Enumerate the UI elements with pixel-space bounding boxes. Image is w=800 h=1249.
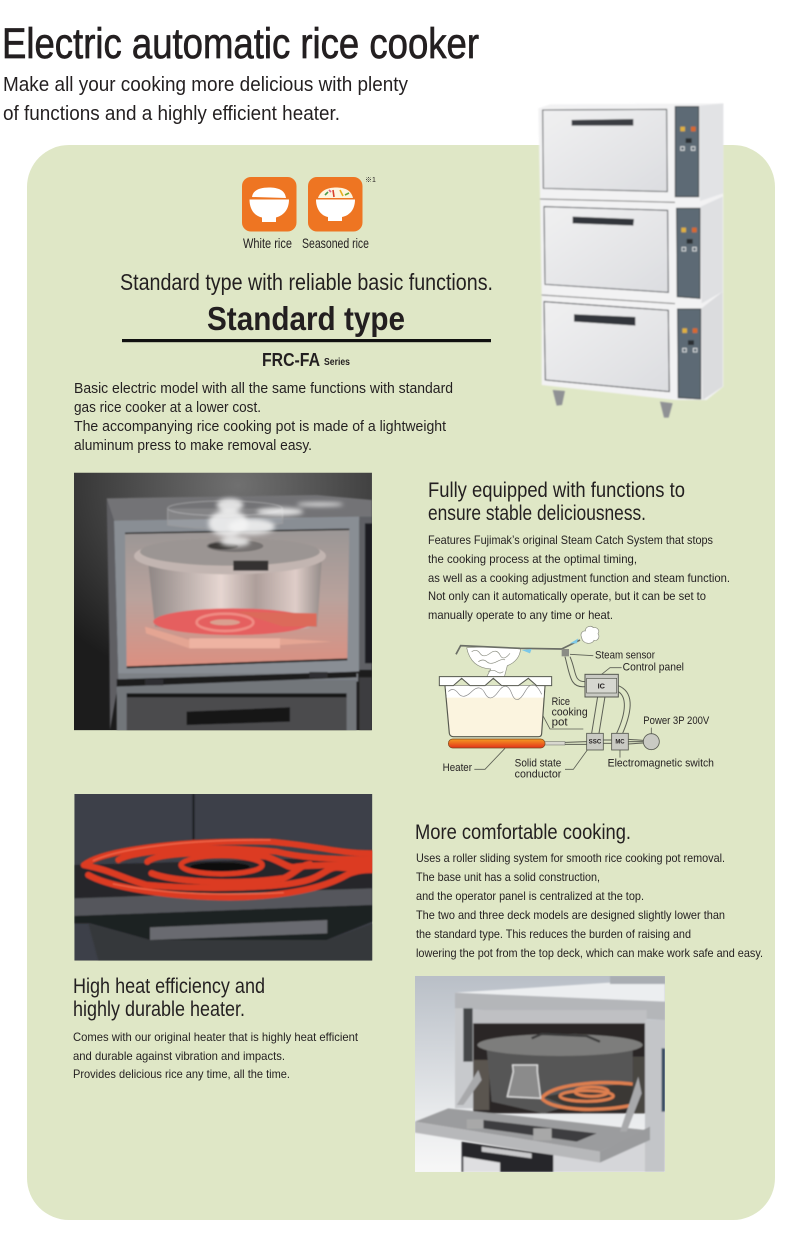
SSC box [587, 733, 603, 750]
text block: introduction: Basic electric model with all the same functions with standard [74, 380, 453, 397]
control panels [675, 107, 699, 197]
text block: heater: Comes with our original heater that is highly heat efficient [73, 1030, 359, 1044]
text block: stable deliciousness: Not only can it automatically operate, but it can be set to [428, 589, 706, 603]
text block: heater: and durable against vibration and impacts. [73, 1049, 285, 1063]
diagram labels: Power 3P 200V [643, 715, 710, 727]
red glow [153, 608, 313, 635]
icon: white rice [242, 177, 296, 232]
heading: heater: High heat efficiency and [73, 975, 265, 998]
MC box: MC [615, 739, 625, 746]
icon labels: Seasoned rice [302, 235, 369, 251]
text block: comfortable cooking: and the operator panel is centralized at the top. [416, 889, 644, 903]
photo: roller sliding drawer [415, 976, 665, 1172]
subtitle: of functions and a highly efficient heater. [3, 102, 340, 125]
diagram labels: cooking [552, 706, 588, 718]
MC box [612, 733, 628, 750]
handles [572, 119, 633, 126]
heading: standard type: Standard type [207, 300, 405, 337]
leader lines [474, 654, 651, 769]
doors [543, 109, 667, 192]
glass ring [168, 501, 282, 516]
pot body [148, 562, 322, 633]
text block: comfortable cooking: Uses a roller sliding system for smooth rice cooking pot removal. [416, 851, 725, 865]
lower deck [462, 1142, 553, 1172]
subtitle: Make all your cooking more delicious with plenty [3, 73, 409, 96]
text block: introduction: aluminum press to make removal easy. [74, 437, 312, 454]
lower deck [118, 673, 358, 682]
text block: comfortable cooking [416, 851, 763, 960]
text block: introduction: The accompanying rice cooking pot is made of a lightweight [74, 418, 447, 435]
coil [543, 1082, 633, 1113]
diagram labels [443, 649, 714, 781]
text block: stable deliciousness: as well as a cooking adjustment function and steam function. [428, 571, 730, 585]
heading: standard type: Series [324, 357, 350, 368]
heater [545, 742, 565, 745]
icon: seasoned rice [308, 177, 362, 232]
heading: stable deliciousness: ensure stable deliciousness. [428, 502, 646, 525]
text block: introduction [74, 380, 453, 454]
pot [487, 1048, 633, 1113]
photo: heater coil [74, 794, 372, 961]
wires [565, 657, 643, 744]
text block: stable deliciousness: Features Fujimak’s original Steam Catch System that stops [428, 533, 713, 547]
power source [643, 734, 659, 750]
diagram labels: pot [552, 716, 568, 728]
IC box [585, 674, 618, 697]
diagram labels: Steam sensor [595, 649, 655, 661]
legs [553, 390, 565, 406]
text block: comfortable cooking: lowering the pot from the top deck, which can make work safe and easy. [416, 946, 763, 960]
diagram labels: Rice [552, 696, 570, 708]
heading: stable deliciousness [428, 479, 685, 525]
text block: comfortable cooking: the standard type. This reduces the burden of raising and [416, 927, 691, 941]
text block: stable deliciousness: manually operate to any time or heat. [428, 608, 613, 622]
diagram labels: Heater [443, 762, 472, 774]
diagram: steam catch system [439, 626, 714, 781]
heading: standard type: Standard type with reliable basic functions. [120, 269, 493, 295]
text block: heater [73, 1030, 359, 1081]
diagram labels: Solid state [515, 757, 561, 769]
text block: comfortable cooking: The base unit has a solid construction, [416, 870, 600, 884]
lid and vent [456, 640, 580, 654]
diagram labels: conductor [515, 769, 562, 781]
IC box: IC [598, 682, 606, 691]
text block: comfortable cooking: The two and three deck models are designed slightly lower than [416, 908, 725, 922]
icon labels: White rice [243, 235, 292, 251]
text block: introduction: gas rice cooker at a lower cost. [74, 399, 261, 416]
photo: steam and pot cutaway [74, 473, 372, 732]
diagram labels: Electromagnetic switch [608, 757, 714, 769]
icon labels [243, 235, 369, 251]
text block: heater: Provides delicious rice any time, all the time. [73, 1067, 290, 1081]
steam inside lid [467, 647, 521, 678]
drawer front [415, 1108, 645, 1152]
heading: comfortable cooking: More comfortable cooking. [415, 821, 631, 844]
coil [84, 842, 372, 897]
heading: standard type [120, 269, 493, 370]
text block: stable deliciousness: the cooking process at the optimal timing, [428, 552, 637, 566]
footnote mark: ※1 [365, 176, 376, 184]
title: Electric automatic rice cooker [2, 20, 479, 68]
product photo: three-deck rice cooker [538, 103, 723, 418]
subtitle [3, 73, 409, 125]
rice cooking pot [445, 686, 545, 737]
steam [208, 498, 343, 546]
diagram labels: Control panel [623, 662, 684, 674]
heading: heater: highly durable heater. [73, 998, 245, 1021]
steam puff [581, 626, 599, 643]
heading: standard type: FRC-FA [262, 350, 320, 370]
SSC box: SSC [589, 739, 601, 746]
heading: stable deliciousness: Fully equipped with functions to [428, 479, 685, 502]
text block: stable deliciousness [428, 533, 730, 622]
heading: heater [73, 975, 265, 1021]
